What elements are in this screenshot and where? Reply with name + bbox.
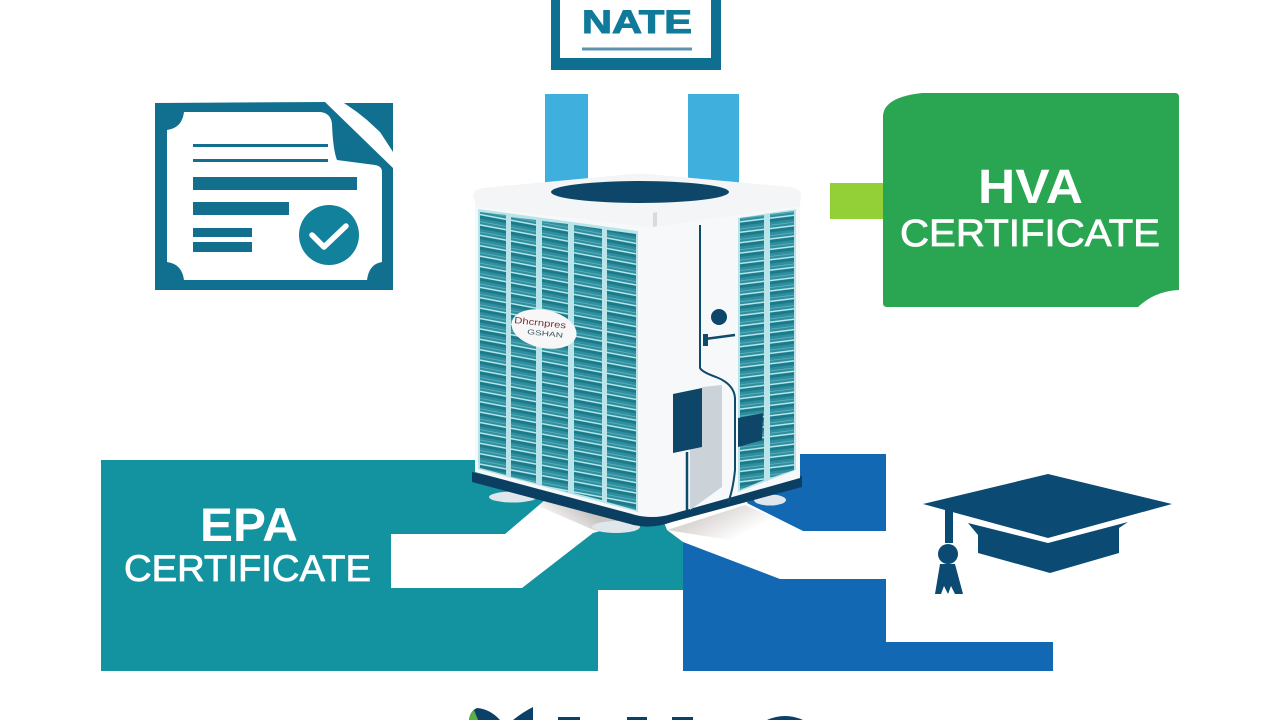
band shadow: [538, 498, 625, 531]
brand label: [508, 304, 580, 354]
cap base: [968, 522, 1128, 573]
connector bars: NATE to unit: [545, 94, 739, 184]
service valve: [705, 335, 735, 339]
left grille: [480, 212, 636, 510]
panel subheading: CERTIFICATE: [124, 548, 371, 589]
band shadow: [667, 505, 803, 545]
grey access panel: [690, 385, 722, 510]
panel: blue stepped block: [667, 454, 1053, 671]
panel shape: [883, 93, 1179, 307]
lower blue block: [683, 542, 1053, 671]
gauge dot: [711, 309, 727, 325]
teal panel shape: [101, 460, 683, 671]
panel heading: HVA: [978, 161, 1083, 214]
icon: graduation cap: [923, 474, 1172, 594]
badge frame: [551, 0, 721, 70]
bottom logo, cropped by page edge: [469, 707, 803, 720]
certificate text lines: [193, 144, 357, 252]
certificate frame: [155, 102, 393, 290]
side box: [738, 413, 763, 447]
upper blue block: [747, 454, 886, 531]
badge underline: [582, 48, 692, 50]
certificate corner piece: [344, 103, 393, 152]
fan opening: [551, 181, 729, 203]
panel: EPA certificate: [101, 460, 683, 671]
panel heading: EPA: [200, 498, 298, 551]
white notch band: [391, 500, 640, 588]
panel: HVA certificate: [883, 93, 1179, 307]
unit base: [472, 472, 802, 527]
certificate paper: [167, 112, 382, 280]
top cover: [473, 174, 801, 227]
logo wordmark tops, cropped: [558, 716, 803, 720]
cap board: [923, 474, 1172, 538]
icon: check badge: [299, 205, 359, 265]
NATE badge: [551, 0, 721, 70]
grille backing right: [738, 209, 796, 492]
control box: [673, 388, 702, 453]
unit feet: [489, 492, 786, 533]
unit body: [475, 205, 800, 517]
icon: certificate document: [155, 102, 393, 290]
HVA certificate connector: [830, 183, 884, 219]
badge label: NATE: [582, 4, 692, 40]
air conditioner unit: [472, 174, 802, 533]
top cover front edge: [653, 212, 657, 227]
brand label: Dhcrnpres: [514, 315, 567, 330]
panel subheading: CERTIFICATE: [900, 213, 1160, 255]
right grille: [740, 211, 794, 490]
brand label: GSHAN: [527, 329, 563, 340]
door seam and cable: [700, 225, 735, 503]
logo leaf mark: [469, 707, 533, 720]
control box lead: [686, 452, 688, 510]
tassel: [935, 509, 963, 594]
grille backing left: [478, 209, 638, 512]
